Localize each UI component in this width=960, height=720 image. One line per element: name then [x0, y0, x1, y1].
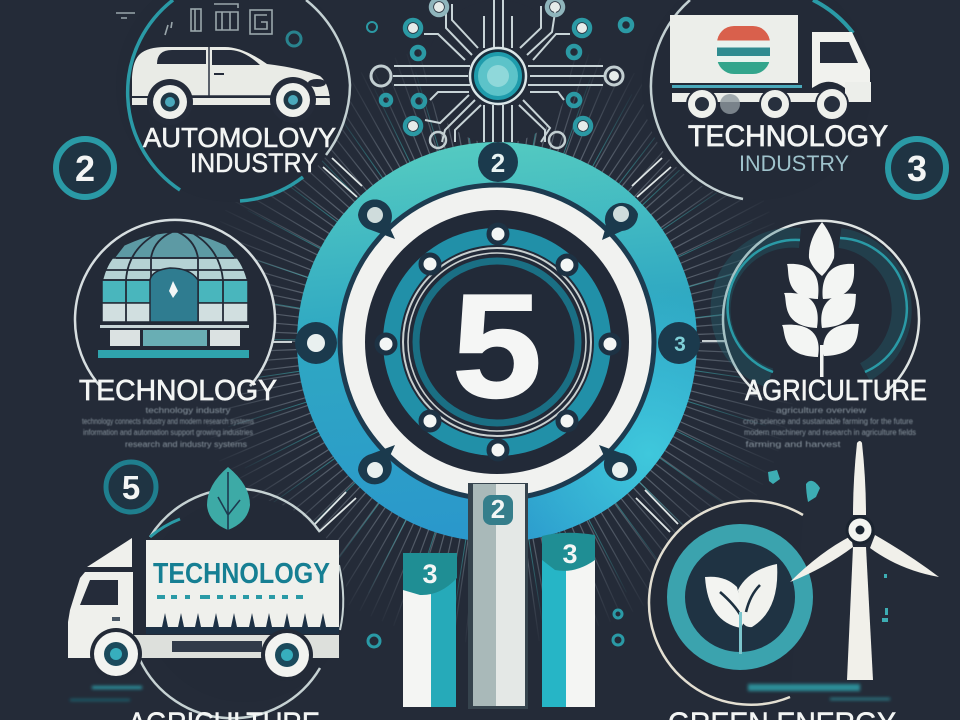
silver rings	[403, 248, 591, 436]
panel: agriculture	[721, 221, 927, 449]
icon: sprout leaves	[705, 564, 777, 654]
icon: wind turbine	[790, 441, 939, 680]
icon: striped emblem	[717, 26, 770, 74]
decorative teal specks	[768, 470, 888, 622]
panel: technology truck lower left	[68, 467, 347, 720]
circle frame	[642, 0, 872, 200]
heading: technology: TECHNOLOGY	[79, 375, 277, 407]
big number 5: 5	[452, 264, 542, 429]
badge: number 2: 2	[75, 148, 95, 189]
badge: number 3: 3	[907, 148, 927, 189]
text block: agriculture description: crop science and sustainable farming for the future	[743, 417, 914, 426]
ground glow	[748, 684, 890, 700]
icon: glass dome	[102, 232, 248, 322]
text block: agriculture description	[743, 406, 916, 449]
bar 3	[542, 533, 595, 707]
badge: number 2	[56, 139, 114, 197]
icon: truck	[670, 15, 871, 120]
white ring	[340, 185, 654, 499]
bar 1	[403, 553, 457, 707]
road streaks	[70, 686, 142, 701]
icon: dome base	[98, 325, 249, 358]
icon: wheat sprig	[782, 222, 859, 377]
text block: agriculture description: modern machinery and research in agriculture fields	[744, 428, 916, 437]
circle frame	[721, 221, 919, 393]
icon: teal ring	[676, 533, 804, 661]
badge: number 5: 5	[122, 469, 140, 506]
text block: technology description: information and automation support growing industries	[83, 428, 253, 437]
icon: small teal dots beside bars	[368, 610, 623, 647]
circle frame	[75, 220, 275, 400]
badge: number 3	[888, 139, 946, 197]
chart: central dial	[295, 142, 700, 542]
panel: technology truck	[642, 0, 888, 200]
icon: car	[132, 47, 330, 125]
text block: technology description: research and industry systems	[125, 440, 247, 449]
dark band	[365, 210, 629, 474]
panel: technology dome	[75, 220, 277, 449]
pin label 3: 3	[674, 333, 686, 356]
pin label 2: 2	[491, 148, 505, 178]
heading: agriculture: AGRICULTURE	[745, 375, 927, 407]
panel: automotive industry	[116, 0, 350, 202]
icon: delivery truck	[68, 538, 339, 681]
heading: technology: TECHNOLOGY	[688, 120, 888, 153]
radial rays around central dial	[247, 92, 747, 592]
chart: three bars	[403, 483, 595, 709]
badge: number 5	[106, 462, 156, 512]
text block: technology description: technology connects industry and modern research systems	[82, 417, 254, 426]
heading: automotive: AUTOMOLOVY	[143, 122, 336, 153]
inner pin dots	[377, 225, 619, 459]
truck label: TECHNOLOGY	[153, 558, 330, 590]
icon: central circuit hub	[367, 0, 632, 148]
circle frame	[649, 501, 803, 705]
bar 3: 3	[562, 539, 578, 569]
icon: leaf	[207, 467, 250, 530]
teal band	[383, 228, 611, 456]
text block: technology description	[82, 406, 254, 449]
heading: industry: INDUSTRY	[190, 148, 318, 178]
bar 2: 2	[491, 494, 505, 524]
icon: small glyph marks	[116, 4, 301, 46]
heading: industry: INDUSTRY	[739, 151, 849, 176]
panel: green energy	[649, 441, 939, 720]
bar 1: 3	[422, 559, 438, 589]
bar 2	[468, 483, 528, 709]
outer gradient ring	[297, 142, 697, 542]
text block: technology description: technology industry	[146, 406, 230, 415]
text block: agriculture description: agriculture overview	[776, 406, 866, 415]
circle frame	[140, 489, 347, 718]
text block: agriculture description: farming and harvest	[746, 440, 842, 449]
circle frame	[116, 0, 350, 202]
ring pins	[295, 142, 700, 484]
